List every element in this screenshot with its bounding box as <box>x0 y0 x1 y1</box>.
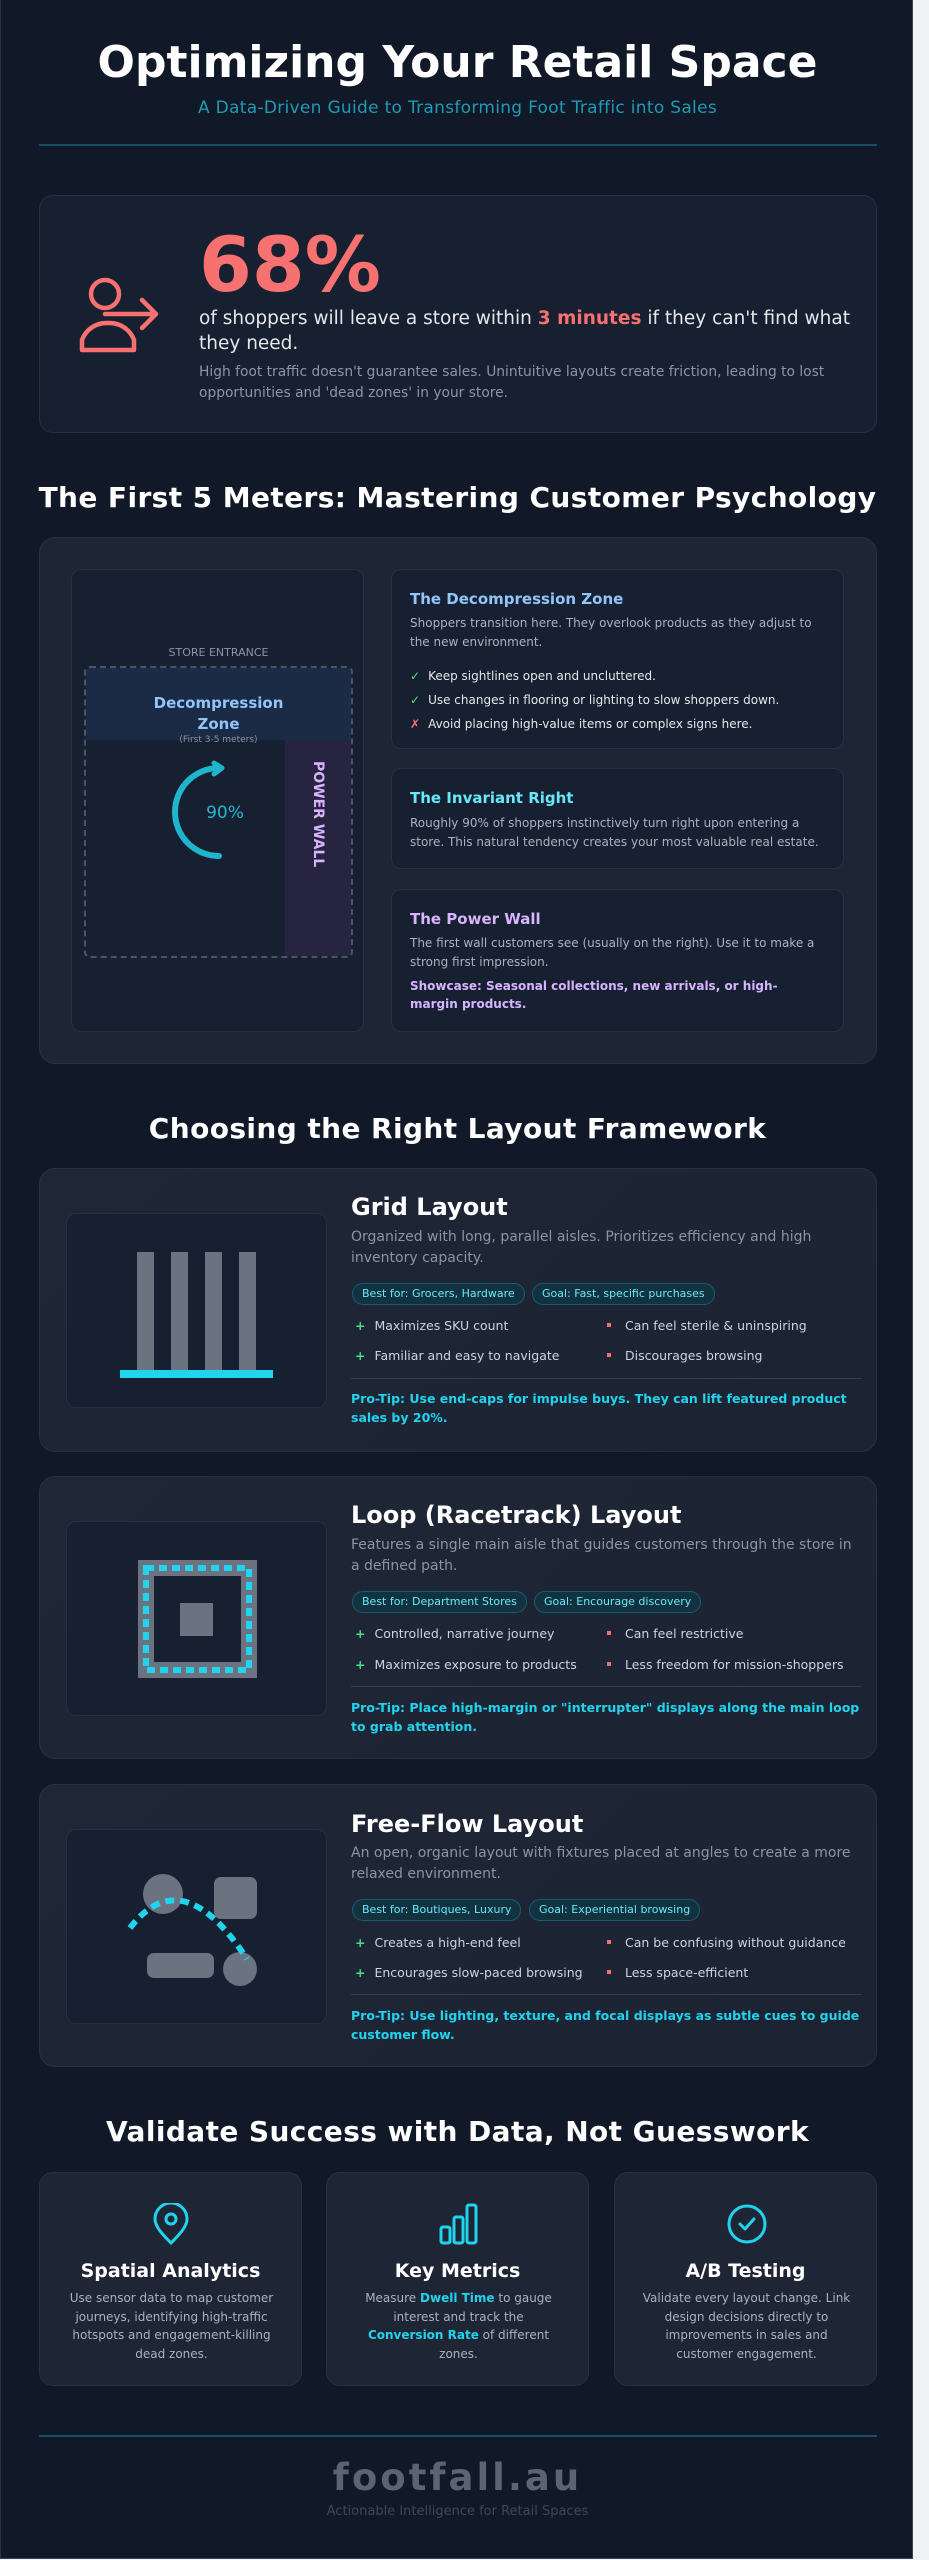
card: a/b testing: A/B Testing <box>685 2260 806 2282</box>
card: decompression zone: Shoppers transition here. They overlook products as they adjust to the new environment. <box>410 616 812 649</box>
icon: check circle <box>728 2204 766 2244</box>
card: key metrics <box>326 2172 589 2386</box>
panel: grid layout: Can feel sterile & uninspiring <box>625 1318 807 1333</box>
panel: free-flow layout: + Encourages slow-paced browsing <box>355 1965 583 1980</box>
card: key metrics: Measure Dwell Time to gauge interest and track the Conversion Rate of different zones. <box>365 2291 552 2360</box>
panel: free-flow layout: An open, organic layout with fixtures placed at angles to create a more relaxed environment. <box>351 1845 851 1882</box>
panel: loop layout: Loop (Racetrack) Layout <box>351 1501 681 1529</box>
footer brand: footfall.au <box>333 2456 582 2499</box>
panel: loop layout: Goal: Encourage discovery <box>544 1595 691 1608</box>
icon: bar chart <box>440 2204 478 2244</box>
card: spatial analytics: Use sensor data to map customer journeys, identifying high-traffic hotspots and engagement-killing dead zones. <box>70 2291 273 2360</box>
panel: free-flow layout: Goal: Experiential browsing <box>539 1903 690 1916</box>
tags: Best for: Grocers, Hardware <box>362 1287 515 1300</box>
card: power wall: Showcase: Seasonal collections, new arrivals, or high-margin products. <box>410 979 778 1011</box>
panel: grid layout: Grid Layout <box>351 1193 508 1221</box>
panel: free-flow layout: Can be confusing without guidance <box>625 1935 846 1950</box>
decompression zone <box>86 668 351 740</box>
heading: first 5 meters: The First 5 Meters: Mastering Customer Psychology <box>39 481 876 514</box>
panel: grid layout: Organized with long, parallel aisles. Prioritizes efficiency and high inventory capacity. <box>351 1229 811 1266</box>
power wall <box>285 740 351 960</box>
icon: grid aisles <box>66 1213 327 1408</box>
card: power wall: The first wall customers see (usually on the right). Use it to make a strong first impression. <box>410 936 814 969</box>
card: invariant right: Roughly 90% of shoppers instinctively turn right upon entering a store. This natural tendency creates your most valuable real estate. <box>410 816 819 849</box>
panel: free-flow layout <box>39 1784 877 2067</box>
panel: grid layout <box>39 1168 877 1452</box>
footer tagline: Actionable Intelligence for Retail Spaces <box>327 2504 588 2519</box>
subtitle: A Data-Driven Guide to Transforming Foot Traffic into Sales <box>198 98 717 118</box>
card: decompression zone <box>391 569 844 749</box>
panel: grid layout: Discourages browsing <box>625 1348 762 1363</box>
tags <box>352 1283 525 1305</box>
card: invariant right <box>391 768 844 869</box>
title: Optimizing Your Retail Space <box>98 37 817 88</box>
arc: turning right <box>172 760 224 859</box>
card: invariant right: The Invariant Right <box>410 789 573 807</box>
dashed store: (First 3-5 meters) <box>179 735 258 745</box>
panel: customer psychology <box>39 537 877 1064</box>
checklist: ✓ Keep sightlines open and uncluttered. <box>410 669 656 683</box>
heading: layouts: Choosing the Right Layout Framework <box>149 1112 766 1145</box>
stat text: of shoppers will leave a store within 3 minutes if they can't find what they need. <box>199 308 850 354</box>
tags: Best for: Boutiques, Luxury <box>362 1903 511 1916</box>
panel: stat card <box>39 195 877 433</box>
icon: location pin <box>154 2203 188 2245</box>
panel: free-flow layout: Free-Flow Layout <box>351 1810 583 1838</box>
panel: free-flow layout: Less space-efficient <box>625 1965 748 1980</box>
label: store entrance: STORE ENTRANCE <box>169 646 268 659</box>
card: a/b testing: Validate every layout change. Link design decisions directly to improvements in sales and customer engagement. <box>643 2291 850 2360</box>
tags <box>352 1591 527 1613</box>
dashed store: Zone <box>197 715 240 733</box>
card: a/b testing <box>614 2172 877 2386</box>
heading: validate: Validate Success with Data, Not Guesswork <box>106 2115 809 2148</box>
dashed store: Decompression <box>154 694 283 712</box>
card: power wall: The Power Wall <box>410 910 541 928</box>
pro tip: Pro-Tip: Use lighting, texture, and focal displays as subtle cues to guide customer flow. <box>351 2008 859 2042</box>
big stat: 68% <box>199 220 381 309</box>
pros and cons: + Maximizes SKU count <box>355 1318 508 1333</box>
panel: grid layout: Goal: Fast, specific purchases <box>542 1287 705 1300</box>
panel: loop layout <box>39 1476 877 1759</box>
panel: loop layout: Can feel restrictive <box>625 1626 743 1641</box>
icon: free-flow <box>66 1829 327 2024</box>
checklist: ✗ Avoid placing high-value items or complex signs here. <box>410 717 752 731</box>
panel: loop layout: + Maximizes exposure to products <box>355 1657 577 1672</box>
store diagram <box>71 569 364 1032</box>
card: key metrics: Key Metrics <box>395 2260 520 2282</box>
tags: Best for: Department Stores <box>362 1595 517 1608</box>
panel: loop layout: Less freedom for mission-shoppers <box>625 1657 844 1672</box>
tags <box>352 1899 521 1921</box>
icon: racetrack <box>66 1521 327 1716</box>
panel: loop layout: Features a single main aisle that guides customers through the store in a defined path. <box>351 1537 852 1574</box>
card: spatial analytics: Spatial Analytics <box>81 2260 260 2282</box>
panel: grid layout: + Familiar and easy to navigate <box>355 1348 559 1363</box>
pro tip: Pro-Tip: Place high-margin or "interrupter" displays along the main loop to grab attention. <box>351 1700 859 1734</box>
stat subtext: High foot traffic doesn't guarantee sales. Unintuitive layouts create friction, leading to lost opportunities and 'dead zones' in your store. <box>199 364 824 401</box>
checklist: ✓ Use changes in flooring or lighting to slow shoppers down. <box>410 693 779 707</box>
dashed store: POWER WALL <box>310 761 326 867</box>
card: spatial analytics <box>39 2172 302 2386</box>
icon: person leaving <box>80 278 158 352</box>
pro tip: Pro-Tip: Use end-caps for impulse buys. They can lift featured product sales by 20%. <box>351 1391 847 1425</box>
dashed store <box>84 666 353 958</box>
pros and cons: + Controlled, narrative journey <box>355 1626 554 1641</box>
card: power wall <box>391 889 844 1032</box>
label: 90%: 90% <box>206 803 244 823</box>
pros and cons: + Creates a high-end feel <box>355 1935 521 1950</box>
checklist <box>410 669 779 731</box>
card: decompression zone: The Decompression Zone <box>410 590 623 608</box>
